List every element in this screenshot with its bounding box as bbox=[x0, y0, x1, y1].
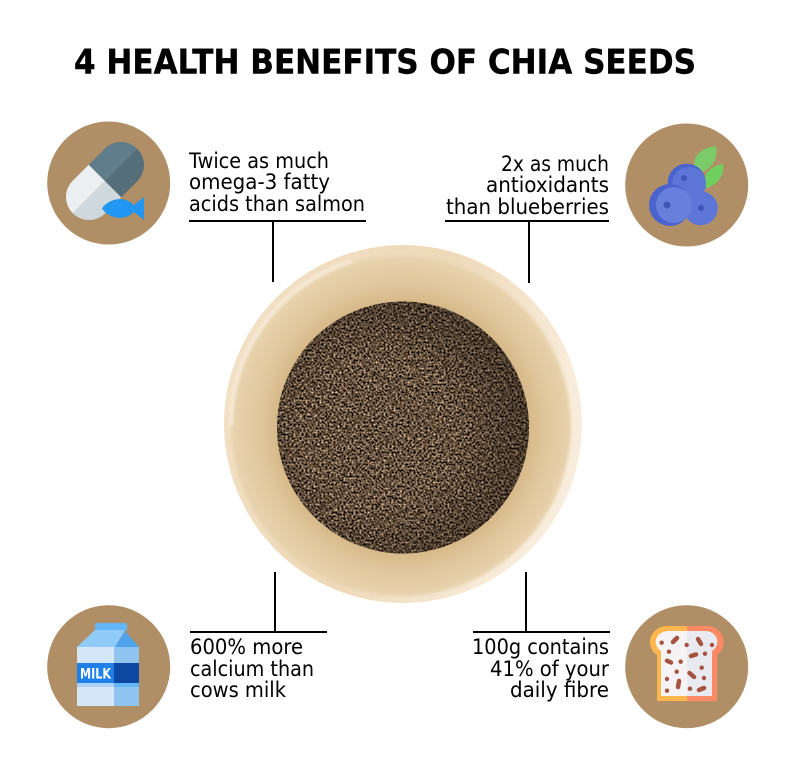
benefit text bbox=[472, 635, 609, 703]
benefit text: omega-3 fatty bbox=[189, 170, 330, 195]
panel: omega-3 benefit bbox=[47, 122, 366, 282]
panel: bowl of chia seeds bbox=[224, 245, 582, 603]
connector line bbox=[473, 572, 610, 632]
title: 4 HEALTH BENEFITS OF CHIA SEEDS bbox=[74, 42, 696, 82]
connector line bbox=[189, 221, 366, 282]
benefit text bbox=[446, 152, 609, 220]
benefit text: 2x as much bbox=[501, 152, 609, 177]
bowl rim bbox=[224, 245, 582, 603]
benefit text: 600% more bbox=[190, 635, 303, 660]
benefit text bbox=[190, 635, 314, 703]
panel: antioxidants benefit bbox=[445, 124, 748, 283]
benefit text: than blueberries bbox=[446, 195, 609, 220]
benefit text bbox=[188, 149, 365, 217]
icon: blueberries bbox=[625, 124, 748, 246]
benefit text: antioxidants bbox=[486, 173, 609, 198]
icon: milk carton bbox=[47, 605, 170, 728]
icon: capsule and fish bbox=[47, 122, 170, 244]
benefit text: calcium than bbox=[190, 657, 314, 682]
panel: calcium benefit bbox=[47, 572, 327, 728]
benefit text: daily fibre bbox=[510, 678, 609, 703]
connector line bbox=[445, 221, 609, 283]
benefit text: cows milk bbox=[190, 678, 286, 703]
benefit text: 41% of your bbox=[490, 657, 609, 682]
icon: wholegrain bread bbox=[625, 605, 748, 728]
rim highlight bbox=[231, 262, 350, 425]
panel: fibre benefit bbox=[472, 572, 748, 728]
milk label: MILK bbox=[80, 666, 112, 682]
bowl inner wall bbox=[231, 256, 571, 596]
connector line bbox=[190, 572, 327, 632]
benefit text: 100g contains bbox=[472, 635, 609, 660]
chia seeds bbox=[277, 302, 529, 554]
benefit text: acids than salmon bbox=[189, 192, 365, 217]
benefit text: Twice as much bbox=[188, 149, 329, 174]
